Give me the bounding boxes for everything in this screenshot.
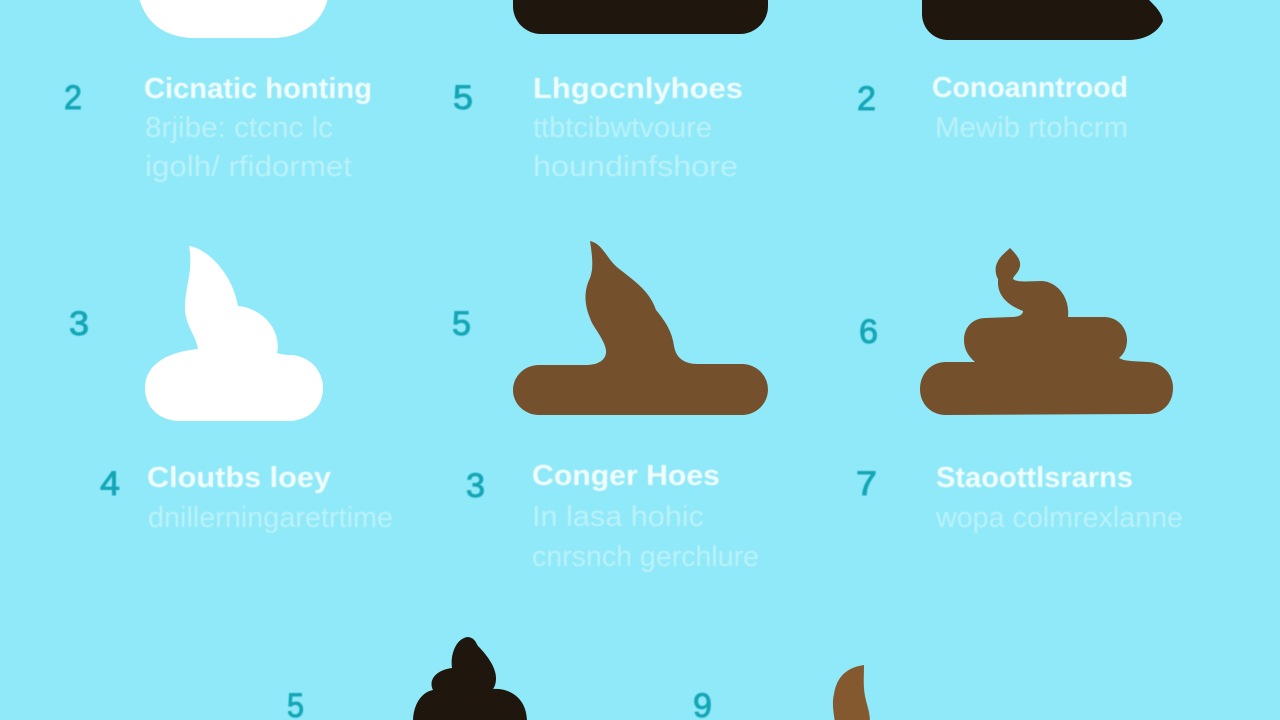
number: row 2 column 2: 5 (452, 305, 471, 343)
item description: wopa colmrexlanne (935, 502, 1183, 534)
item: row 1 column 3 (857, 72, 1128, 144)
icon: brown tiered swirl shape (920, 248, 1173, 415)
number: 2 (857, 80, 876, 118)
item description: ttbtcibwtvoure (533, 112, 712, 144)
item heading: Cloutbs loey (147, 462, 331, 494)
number: 7 (856, 465, 877, 503)
item description: dnillerningaretrtime (148, 502, 393, 534)
icon: dark shape, row 1 column 3 (922, 0, 1163, 40)
item heading: Cicnatic honting (144, 73, 372, 105)
icon: white swirl shape (145, 246, 323, 421)
item description: cnrsnch gerchlure (532, 541, 759, 573)
item: row 3 column 3 (856, 462, 1183, 534)
number: 2 (64, 79, 82, 117)
item: row 1 column 1 (64, 73, 372, 183)
icon: brown shape, bottom (833, 665, 870, 720)
icon: brown tall swirl shape (513, 241, 768, 415)
item heading: Conoanntrood (932, 72, 1128, 104)
number: row 2 column 3: 6 (859, 313, 878, 351)
number: 5 (453, 79, 473, 117)
item heading: Lhgocnlyhoes (533, 73, 743, 105)
number: row 2 column 1: 3 (69, 305, 89, 343)
number: 4 (100, 465, 120, 503)
item description: igolh/ rfidormet (145, 151, 352, 183)
item description: 8rjibe: ctcnc lc (145, 112, 333, 144)
item heading: Conger Hoes (532, 460, 720, 492)
item: row 3 column 1 (100, 462, 393, 534)
item description: In lasa hohic (532, 501, 704, 533)
icon: dark swirl shape, bottom (413, 637, 527, 720)
item description: Mewib rtohcrm (935, 112, 1128, 144)
item description: houndinfshore (533, 151, 738, 183)
icon: white shape, row 1 column 1 (139, 0, 328, 38)
item: row 3 column 2 (466, 460, 759, 573)
icon: dark shape, row 1 column 2 (513, 0, 768, 34)
number: 3 (466, 467, 485, 505)
item heading: Staoottlsrarns (936, 462, 1133, 494)
item: row 1 column 2 (453, 73, 743, 183)
